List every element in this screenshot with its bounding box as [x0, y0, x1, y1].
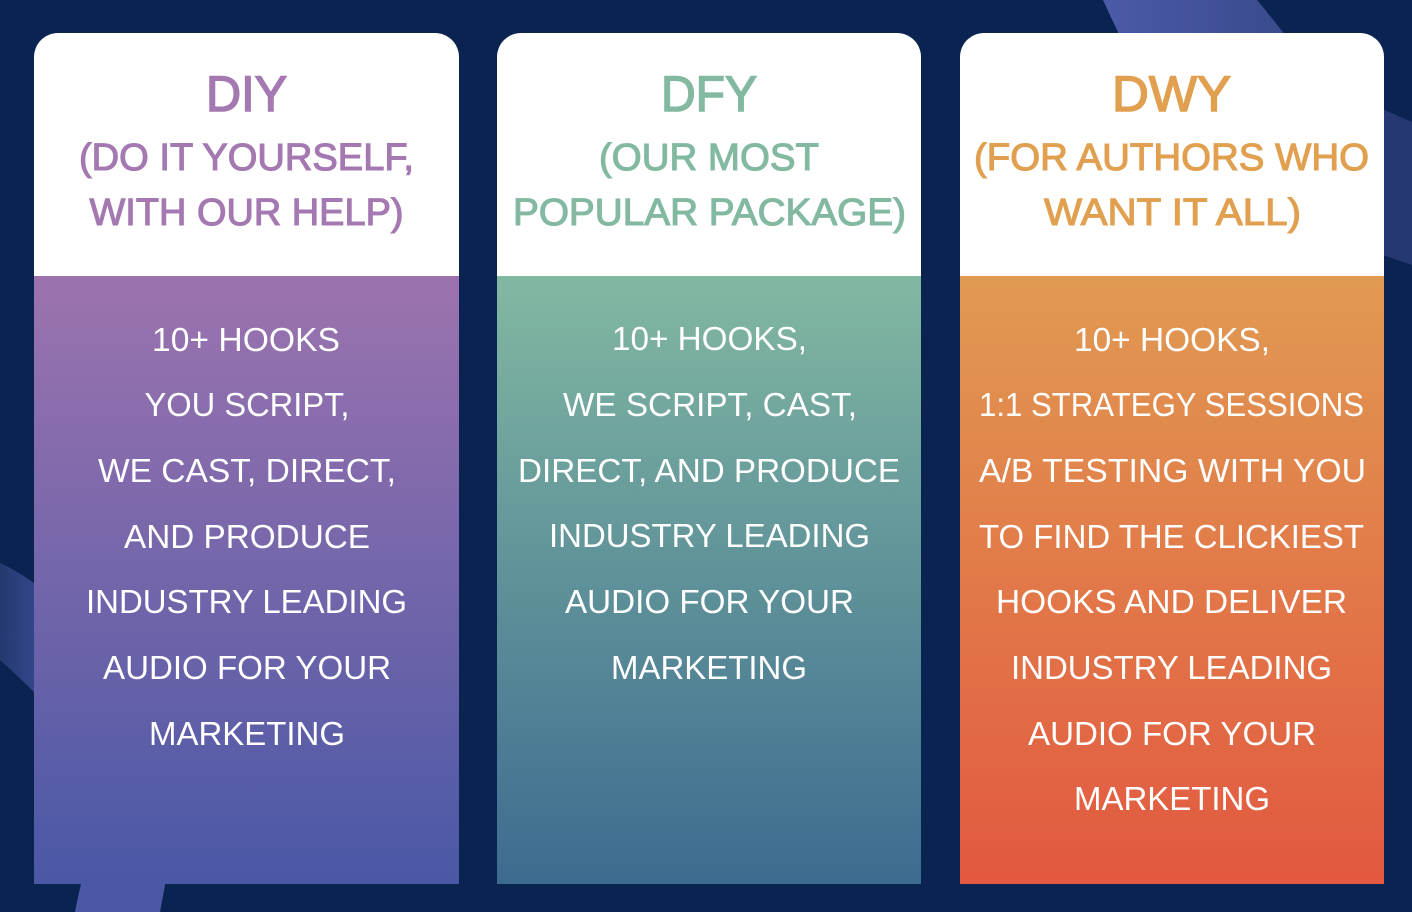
- ribbon: right edge: [1380, 108, 1412, 265]
- card body: DFY: [497, 276, 921, 884]
- heading: DIY: DIY: [206, 66, 287, 122]
- subheading: DWY: (FOR AUTHORS WHO: [974, 137, 1369, 179]
- subheading: DWY: WANT IT ALL): [1044, 192, 1301, 234]
- subheading: DWY: [974, 137, 1369, 234]
- panel: DWY: [960, 33, 1384, 884]
- card header: DFY: [497, 33, 921, 276]
- feature list: DWY: 10+ HOOKS,: [1074, 322, 1270, 359]
- subheading: DFY: POPULAR PACKAGE): [513, 192, 906, 234]
- ribbon: bottom left: [75, 880, 166, 912]
- feature list: DFY: AUDIO FOR YOUR: [565, 584, 854, 621]
- heading: DFY: DFY: [661, 66, 757, 122]
- feature list: DFY: DIRECT, AND PRODUCE: [518, 453, 900, 490]
- card body: DWY: [960, 276, 1384, 884]
- subheading: DIY: WITH OUR HELP): [90, 192, 404, 234]
- feature list: DIY: WE CAST, DIRECT,: [98, 453, 396, 490]
- subheading: DFY: [513, 137, 906, 234]
- feature list: DWY: [979, 322, 1366, 818]
- subheading: DIY: [79, 137, 414, 234]
- panel: DIY: [34, 33, 459, 884]
- feature list: DFY: MARKETING: [611, 650, 807, 687]
- feature list: DWY: HOOKS AND DELIVER: [996, 584, 1347, 621]
- heading: DWY: DWY: [1112, 66, 1231, 122]
- feature list: DWY: TO FIND THE CLICKIEST: [979, 519, 1364, 556]
- feature list: DWY: INDUSTRY LEADING: [1011, 650, 1332, 687]
- feature list: DFY: 10+ HOOKS,: [612, 321, 807, 358]
- feature list: DIY: 10+ HOOKS: [152, 322, 340, 359]
- panel: DFY: [497, 33, 921, 884]
- feature list: DWY: 1:1 STRATEGY SESSIONS: [979, 387, 1364, 424]
- feature list: DIY: MARKETING: [149, 716, 345, 753]
- feature list: DIY: [86, 322, 407, 753]
- card body: DIY: [34, 276, 459, 884]
- subheading: DFY: (OUR MOST: [599, 137, 819, 179]
- feature list: DFY: [518, 321, 900, 687]
- feature list: DIY: YOU SCRIPT,: [144, 387, 350, 424]
- card header: DWY: [960, 33, 1384, 276]
- ribbon: left edge: [0, 563, 38, 696]
- card header: DIY: [34, 33, 459, 276]
- ribbon: top right: [1103, 0, 1286, 36]
- feature list: DWY: AUDIO FOR YOUR: [1028, 716, 1316, 753]
- feature list: DIY: AUDIO FOR YOUR: [103, 650, 391, 687]
- subheading: DIY: (DO IT YOURSELF,: [79, 137, 414, 179]
- feature list: DIY: AND PRODUCE: [124, 519, 370, 556]
- feature list: DWY: A/B TESTING WITH YOU: [979, 453, 1366, 490]
- feature list: DFY: WE SCRIPT, CAST,: [563, 387, 857, 424]
- feature list: DWY: MARKETING: [1074, 781, 1270, 818]
- feature list: DIY: INDUSTRY LEADING: [86, 584, 407, 621]
- feature list: DFY: INDUSTRY LEADING: [549, 518, 870, 555]
